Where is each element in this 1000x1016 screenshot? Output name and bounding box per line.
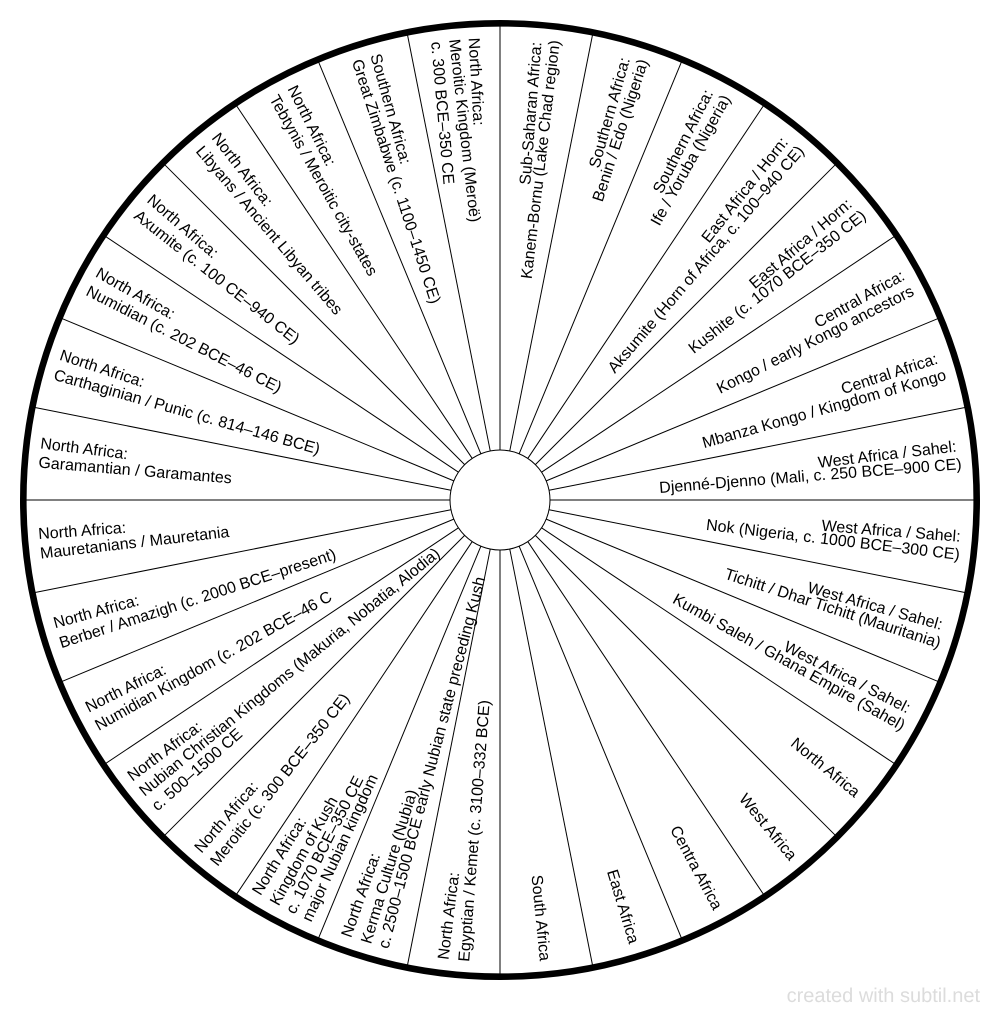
label: Numidian Kingdom: North Africa: xyxy=(83,662,169,716)
label: Numidian: Numidian (c. 202 BCE–46 CE) xyxy=(83,283,284,397)
label: Mbanza Kongo: Mbanza Kongo / Kingdom of Kongo xyxy=(700,367,948,452)
label: Tebtynis: North Africa: xyxy=(284,83,338,169)
label: Mauretanians: North Africa: xyxy=(38,520,127,543)
label: Egyptian / Kemet: North Africa: xyxy=(435,871,463,961)
label: Tichitt: Tichitt / Dhar Tichitt (Mauritania) xyxy=(722,566,943,652)
label: Tichitt: West Africa / Sahel: xyxy=(806,580,944,634)
label: Aksumite: East Africa / Horn: xyxy=(699,135,792,246)
label: Kingdom of Kush: North Africa: xyxy=(249,815,310,898)
label: Benin / Edo: Benin / Edo (Nigeria) xyxy=(590,57,652,204)
label: Kumbi Saleh: West Africa / Sahel: xyxy=(781,639,913,717)
label: Kumbi Saleh: Kumbi Saleh / Ghana Empire (Sahel) xyxy=(670,591,908,735)
label: Egyptian / Kemet: Egyptian / Kemet (c. 3100–332 BCE) xyxy=(456,699,494,962)
label: Mauretanians: Mauretanians / Mauretania xyxy=(39,524,230,563)
label: South Africa: South Africa xyxy=(527,874,553,962)
label: Djenné-Djenno xyxy=(659,439,962,497)
label: Great Zimbabwe: Southern Africa: xyxy=(366,52,413,166)
label: Djenné-Djenno: Djenné-Djenno (Mali, c. 250 BCE–900 CE) xyxy=(659,456,962,497)
label: Tebtynis: Tebtynis / Meroitic city-states xyxy=(265,92,380,279)
label: Kerma Culture: Kerma Culture (Nubia) xyxy=(358,788,421,946)
label: Meroitic Kingdom: Meroitic Kingdom (Meroë) xyxy=(445,38,483,223)
label: Berber / Amazigh: North Africa: xyxy=(52,592,141,632)
label: Meroitic: Meroitic (c. 300 BCE–350 CE) xyxy=(207,691,353,869)
label: Kingdom of Kush xyxy=(249,772,382,924)
label: Nok: Nok (Nigeria, c. 1000 BCE–300 CE) xyxy=(705,517,961,564)
label: Mbanza Kongo: Central Africa: xyxy=(839,351,940,398)
label: Kingdom of Kush: major Nubian kingdom xyxy=(299,772,382,924)
label: Axumite: North Africa: xyxy=(143,192,221,262)
label: Axumite: Axumite (c. 100 CE–940 CE) xyxy=(131,207,302,348)
label: West Africa: West Africa xyxy=(735,791,800,864)
label: Numidian Kingdom: Numidian Kingdom (c. 202 BCE–46 C xyxy=(92,588,335,735)
label: Nubian Christian Kingdoms: Nubian Christian Kingdoms (Makuria, Nobatia, Alodia) xyxy=(136,545,444,800)
label: Ife / Yoruba: Ife / Yoruba (Nigeria) xyxy=(648,92,735,229)
label: Kongo: Central Africa: xyxy=(812,268,908,332)
label: Nok: West Africa / Sahel: xyxy=(821,518,961,546)
label: Djenné-Djenno: West Africa / Sahel: xyxy=(817,439,957,472)
label: Kushite: Kushite (c. 1070 BCE–350 CE) xyxy=(686,207,869,357)
label: Meroitic Kingdom: c. 300 BCE–350 CE xyxy=(427,41,457,185)
label: Meroitic Kingdom xyxy=(427,37,487,223)
label: Carthaginian / Punic: North Africa: xyxy=(58,347,146,391)
label: Egyptian / Kemet xyxy=(435,699,494,962)
label: Kingdom of Kush: c. 1070 BCE–350 CE xyxy=(283,774,367,917)
label: Centra Africa: Centra Africa xyxy=(666,823,725,913)
label: Berber / Amazigh: Berber / Amazigh (c. 2000 BCE–present) xyxy=(57,546,338,652)
label: Ife / Yoruba: Southern Africa: xyxy=(650,87,717,196)
label: Libyans: North Africa: xyxy=(208,130,275,210)
label: Garamantian xyxy=(38,435,232,487)
label: Garamantian: Garamantian / Garamantes xyxy=(38,455,232,487)
label: Meroitic Kingdom: North Africa: xyxy=(465,37,487,126)
label: Aksumite: Aksumite (Horn of Africa, c. 100–940 CE) xyxy=(605,143,808,377)
label: Kushite: East Africa / Horn: xyxy=(746,196,856,293)
label: Kerma Culture: c. 2500–1500 BCE early Nubian state preceding Kush xyxy=(376,575,489,950)
label: Numidian: North Africa: xyxy=(93,265,178,323)
watermark: created with subtil.net xyxy=(787,985,980,1007)
inner hub circle xyxy=(450,450,550,550)
label: Garamantian: North Africa: xyxy=(39,435,129,463)
label: Carthaginian / Punic: Carthaginian / Punic (c. 814–146 BCE) xyxy=(52,367,322,458)
label: Meroitic: North Africa: xyxy=(192,779,262,857)
label: Great Zimbabwe: Great Zimbabwe (c. 1100–1450 CE) xyxy=(348,57,443,306)
label: Nubian Christian Kingdoms: North Africa: xyxy=(125,719,205,785)
label: Benin / Edo: Southern Africa: xyxy=(587,56,634,170)
label: East Africa: East Africa xyxy=(603,868,642,946)
label: Nubian Christian Kingdoms: c. 500–1500 CE xyxy=(149,726,246,815)
label: Kingdom of Kush: Kingdom of Kush xyxy=(267,794,342,909)
label: Kanem-Bornu: Kanem-Bornu (Lake Chad region) xyxy=(519,39,564,280)
label: Kanem-Bornu: Sub-Saharan Africa: xyxy=(517,41,546,185)
label: Kerma Culture: North Africa: xyxy=(339,851,384,940)
label: North Africa: North Africa xyxy=(787,735,863,801)
label: Kongo: Kongo / early Kongo ancestors xyxy=(714,283,917,398)
label: Libyans: Libyans / Ancient Libyan tribes xyxy=(192,143,345,318)
